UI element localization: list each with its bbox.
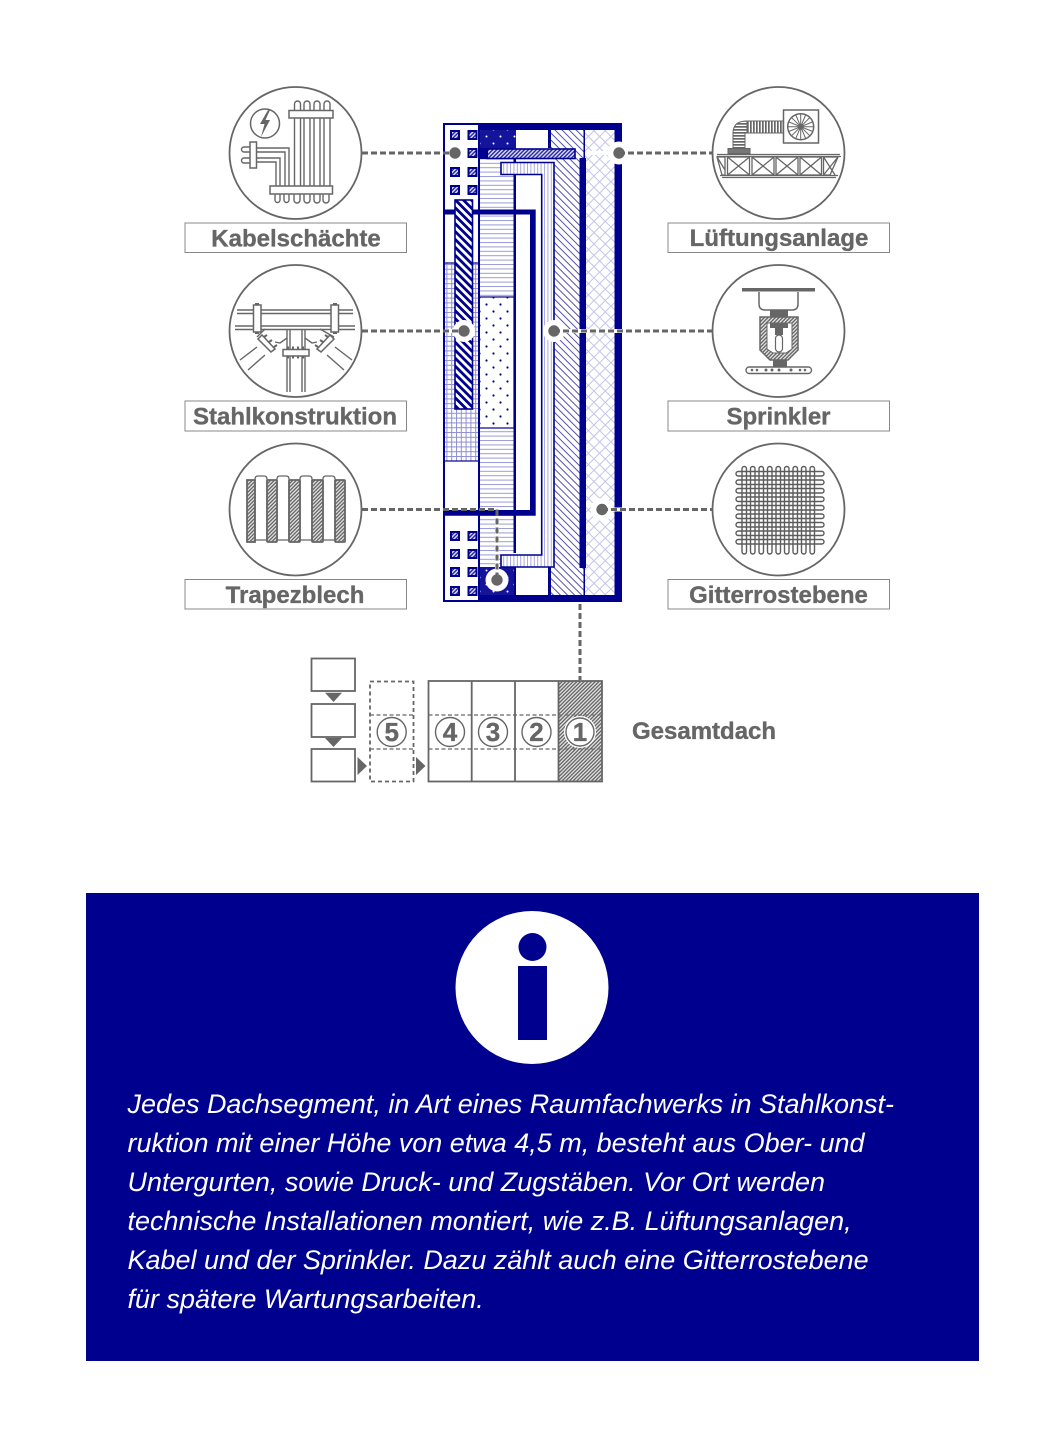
label: Trapezblech: Trapezblech bbox=[226, 582, 364, 609]
number 2 bbox=[522, 717, 551, 747]
dark dotted corner bottom bbox=[479, 567, 516, 597]
upper chord L-profile bbox=[443, 210, 536, 516]
cable squares top bbox=[451, 131, 476, 194]
icon: Kabelschächte bbox=[230, 87, 362, 219]
lower white box outline bbox=[516, 567, 548, 595]
icon: Stahlkonstruktion bbox=[230, 265, 362, 397]
number 4 bbox=[436, 717, 464, 747]
label: Lüftungsanlage: Lüftungsanlage bbox=[690, 225, 868, 252]
placed segments 4 to 1 bbox=[428, 681, 602, 782]
label: Kabelschächte: Kabelschächte bbox=[211, 226, 381, 252]
inner thick vertical bbox=[580, 158, 586, 568]
icon: info bbox=[456, 911, 608, 1064]
number 5 bbox=[377, 717, 406, 747]
bottom band bbox=[479, 595, 622, 602]
body text: Jedes Dachsegment, in Art eines Raumfachwerks in Stahlkonst- bbox=[126, 1089, 894, 1119]
panel: info bbox=[86, 893, 979, 1361]
body text: für spätere Wartungsarbeiten. bbox=[128, 1284, 484, 1314]
pale grid infill, lower chord bbox=[444, 263, 479, 461]
dark dotted corner top bbox=[479, 130, 516, 159]
body text: technische Installationen montiert, wie z.B. Lüftungsanlagen, bbox=[128, 1206, 852, 1236]
small upper vertical bbox=[548, 130, 551, 148]
heading: Gesamtdach: Gesamtdach bbox=[632, 718, 776, 745]
body text: Untergurten, sowie Druck- und Zugstäben. Vor Ort werden bbox=[128, 1167, 825, 1197]
leader lines and marker dots bbox=[362, 142, 712, 680]
body text: ruktion mit einer Höhe von etwa 4,5 m, besteht aus Ober- und bbox=[128, 1128, 866, 1158]
label: Kabelschächte bbox=[185, 223, 406, 252]
small lower vertical bbox=[548, 567, 551, 596]
label: Gitterrostebene: Gitterrostebene bbox=[689, 582, 868, 609]
number 1: 1 bbox=[573, 717, 587, 747]
icon: Sprinkler bbox=[712, 265, 844, 397]
label: Sprinkler: Sprinkler bbox=[726, 404, 831, 430]
label: Stahlkonstruktion: Stahlkonstruktion bbox=[193, 404, 397, 430]
number 3 bbox=[478, 717, 508, 747]
right thick wall bbox=[614, 123, 622, 602]
number 1 bbox=[564, 716, 596, 748]
central roof cross-section bbox=[443, 123, 622, 602]
number 2: 2 bbox=[529, 717, 544, 747]
segment assembly diagram bbox=[312, 658, 602, 782]
dark bar start bbox=[479, 148, 488, 159]
outer frame bbox=[444, 124, 479, 601]
thin top vertical bbox=[584, 130, 585, 158]
diagonal strut bbox=[455, 200, 472, 409]
arrows bbox=[325, 693, 426, 775]
lower small divider bbox=[514, 566, 516, 596]
horizontally ruled column bbox=[479, 159, 514, 567]
thin bottom vertical bbox=[584, 568, 585, 596]
waiting segments stack bbox=[312, 658, 355, 782]
number 4: 4 bbox=[443, 717, 458, 747]
label: Sprinkler bbox=[668, 401, 890, 431]
diagonal hatched column bbox=[551, 130, 584, 596]
dashed segment 5 bbox=[370, 682, 414, 782]
pale channel section bbox=[501, 162, 554, 567]
top band bbox=[479, 123, 622, 130]
body text bbox=[126, 1089, 894, 1314]
cable squares bottom bbox=[451, 532, 476, 595]
hatched horizontal bar bbox=[487, 149, 575, 158]
label: Trapezblech bbox=[185, 580, 406, 609]
number 3: 3 bbox=[486, 717, 500, 747]
hatched segment 1 bbox=[558, 681, 602, 782]
cross-hatched column bbox=[585, 130, 615, 596]
dotted column segment bbox=[479, 297, 514, 428]
icon: Gitterrostebene bbox=[712, 444, 844, 576]
icon: Lüftungsanlage bbox=[712, 87, 844, 219]
body text: Kabel und der Sprinkler. Dazu zählt auch eine Gitterrostebene bbox=[128, 1245, 869, 1275]
vertical line beside ruled column bbox=[514, 159, 516, 553]
white field behind channel bbox=[516, 159, 554, 553]
icon: Trapezblech bbox=[230, 444, 362, 576]
number 5: 5 bbox=[384, 717, 399, 747]
